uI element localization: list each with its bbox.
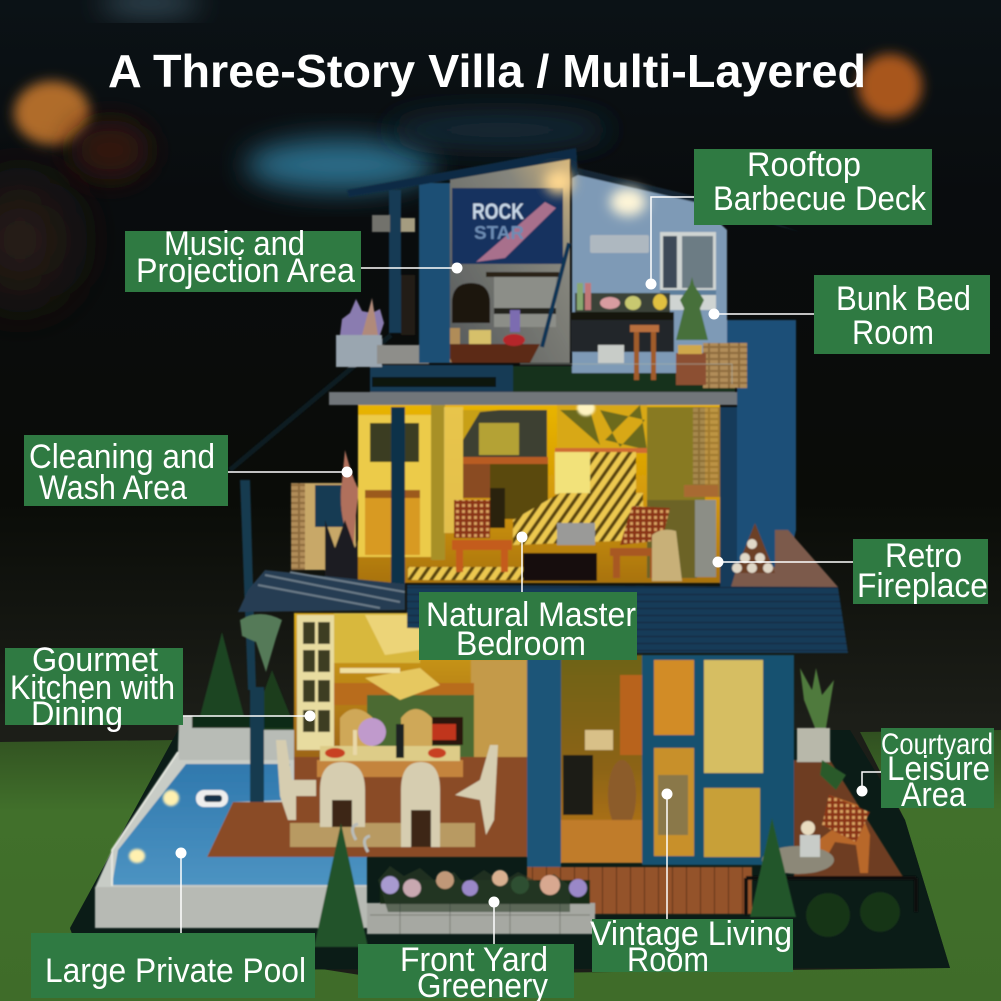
- barbecue room wall: [572, 172, 727, 373]
- blue beam: [370, 365, 513, 392]
- callout: courtyard leisure area: Leisure: [887, 750, 990, 788]
- wooden stool: [630, 325, 659, 380]
- rear planter with hedge: [179, 632, 296, 760]
- callout: retro fireplace: Retro: [885, 537, 962, 575]
- bbq counter: [571, 283, 674, 363]
- callout: rooftop barbecue deck: [646, 146, 932, 290]
- callout: vintage living room: Room: [627, 941, 709, 979]
- diagonal stair rail: [230, 335, 391, 470]
- callout: vintage living room: Vintage Living: [590, 915, 792, 953]
- music room back wall: [450, 155, 570, 363]
- kitchen room: [294, 613, 528, 813]
- callout: bunk bed room: [708, 275, 990, 354]
- callout: bunk bed room: Bunk Bed: [836, 280, 971, 318]
- title: A Three-Story Villa / Multi-Layered: [108, 45, 866, 97]
- window frame with curtains: [642, 655, 794, 865]
- poster: ROCK: [472, 199, 524, 224]
- second floor: [238, 320, 848, 672]
- terrace and firewood: [731, 523, 838, 587]
- living room: [561, 655, 646, 863]
- callout: courtyard leisure area: [856, 728, 994, 814]
- front wooden deck: [527, 867, 752, 914]
- callout: front yard greenery: [358, 896, 574, 1001]
- swimming pool: [95, 718, 367, 928]
- large blue tower: [727, 320, 796, 567]
- blue siding roof: [407, 585, 848, 653]
- callout: courtyard leisure area: Area: [901, 776, 966, 814]
- callout: large private pool: [31, 848, 315, 998]
- house model: [95, 148, 916, 947]
- callout: bunk bed room: Room: [852, 314, 934, 352]
- brick column and planter: [676, 343, 747, 388]
- callout: vintage living room: [590, 788, 793, 979]
- potted plant: [676, 277, 708, 340]
- callout: gourmet kitchen with dining: Gourmet: [32, 641, 159, 679]
- callout: music and projection area: Music and: [164, 225, 305, 263]
- rooftop glow lights: [545, 170, 646, 216]
- planter with dried flowers: [336, 298, 384, 367]
- callout: retro fireplace: [712, 537, 988, 605]
- side planter with plant: [797, 668, 846, 790]
- pool ladder: [352, 824, 370, 852]
- right wicker chair and armchair: [610, 506, 682, 581]
- callout: music and projection area: Projection Area: [136, 252, 355, 290]
- callout: gourmet kitchen with dining: Dining: [31, 695, 123, 733]
- poster: [452, 188, 563, 264]
- air conditioner: [590, 235, 649, 253]
- callout: natural master bedroom: Natural Master: [426, 596, 636, 634]
- callout: gourmet kitchen with dining: [5, 641, 316, 733]
- music room furniture: [377, 272, 559, 364]
- roof: [347, 148, 800, 232]
- pergola post: [240, 480, 264, 815]
- deck floor: [207, 757, 527, 857]
- floor slab: [329, 392, 737, 405]
- glass railing: [520, 364, 732, 384]
- callout: gourmet kitchen with dining: Kitchen with: [10, 669, 175, 707]
- left columns: [372, 183, 450, 363]
- callout: cleaning and wash area: Wash Area: [39, 469, 187, 507]
- poster: STAR: [474, 223, 524, 243]
- zebra rug: [408, 567, 523, 580]
- flower bed wall: [367, 866, 595, 934]
- coffee table and printer: [523, 523, 597, 581]
- dining table and chairs: [276, 709, 498, 847]
- base platform: [70, 730, 950, 970]
- callout: rooftop barbecue deck: Rooftop: [747, 146, 861, 184]
- top floor: [230, 148, 800, 470]
- ground floor: [95, 480, 916, 947]
- callout: rooftop barbecue deck: Barbecue Deck: [713, 180, 927, 218]
- bedroom interior: [358, 405, 720, 583]
- window: [660, 232, 716, 310]
- center column: [527, 650, 561, 867]
- callout: cleaning and wash area: [24, 435, 352, 507]
- diagonal rail inside: [542, 243, 569, 347]
- ceiling lamp: [577, 400, 595, 416]
- callout: front yard greenery: Front Yard: [400, 941, 548, 979]
- callout: natural master bedroom: Bedroom: [456, 625, 586, 663]
- pergola: [238, 570, 405, 672]
- callout: natural master bedroom: [419, 532, 637, 663]
- cone topiary trees and shrubs: [314, 818, 900, 947]
- callout: retro fireplace: Fireplace: [857, 567, 988, 605]
- left wicker chair: [452, 500, 512, 572]
- side balcony room: [291, 450, 375, 590]
- callout: music and projection area: [125, 225, 462, 292]
- rooftop lawn: [513, 366, 735, 392]
- side courtyard: [746, 760, 916, 915]
- grass lawn: [0, 730, 1001, 1001]
- callout: cleaning and wash area: Cleaning and: [29, 438, 215, 476]
- callout: large private pool: Large Private Pool: [45, 952, 306, 990]
- fireplace blue post: [720, 407, 737, 587]
- second floor column: [391, 407, 405, 593]
